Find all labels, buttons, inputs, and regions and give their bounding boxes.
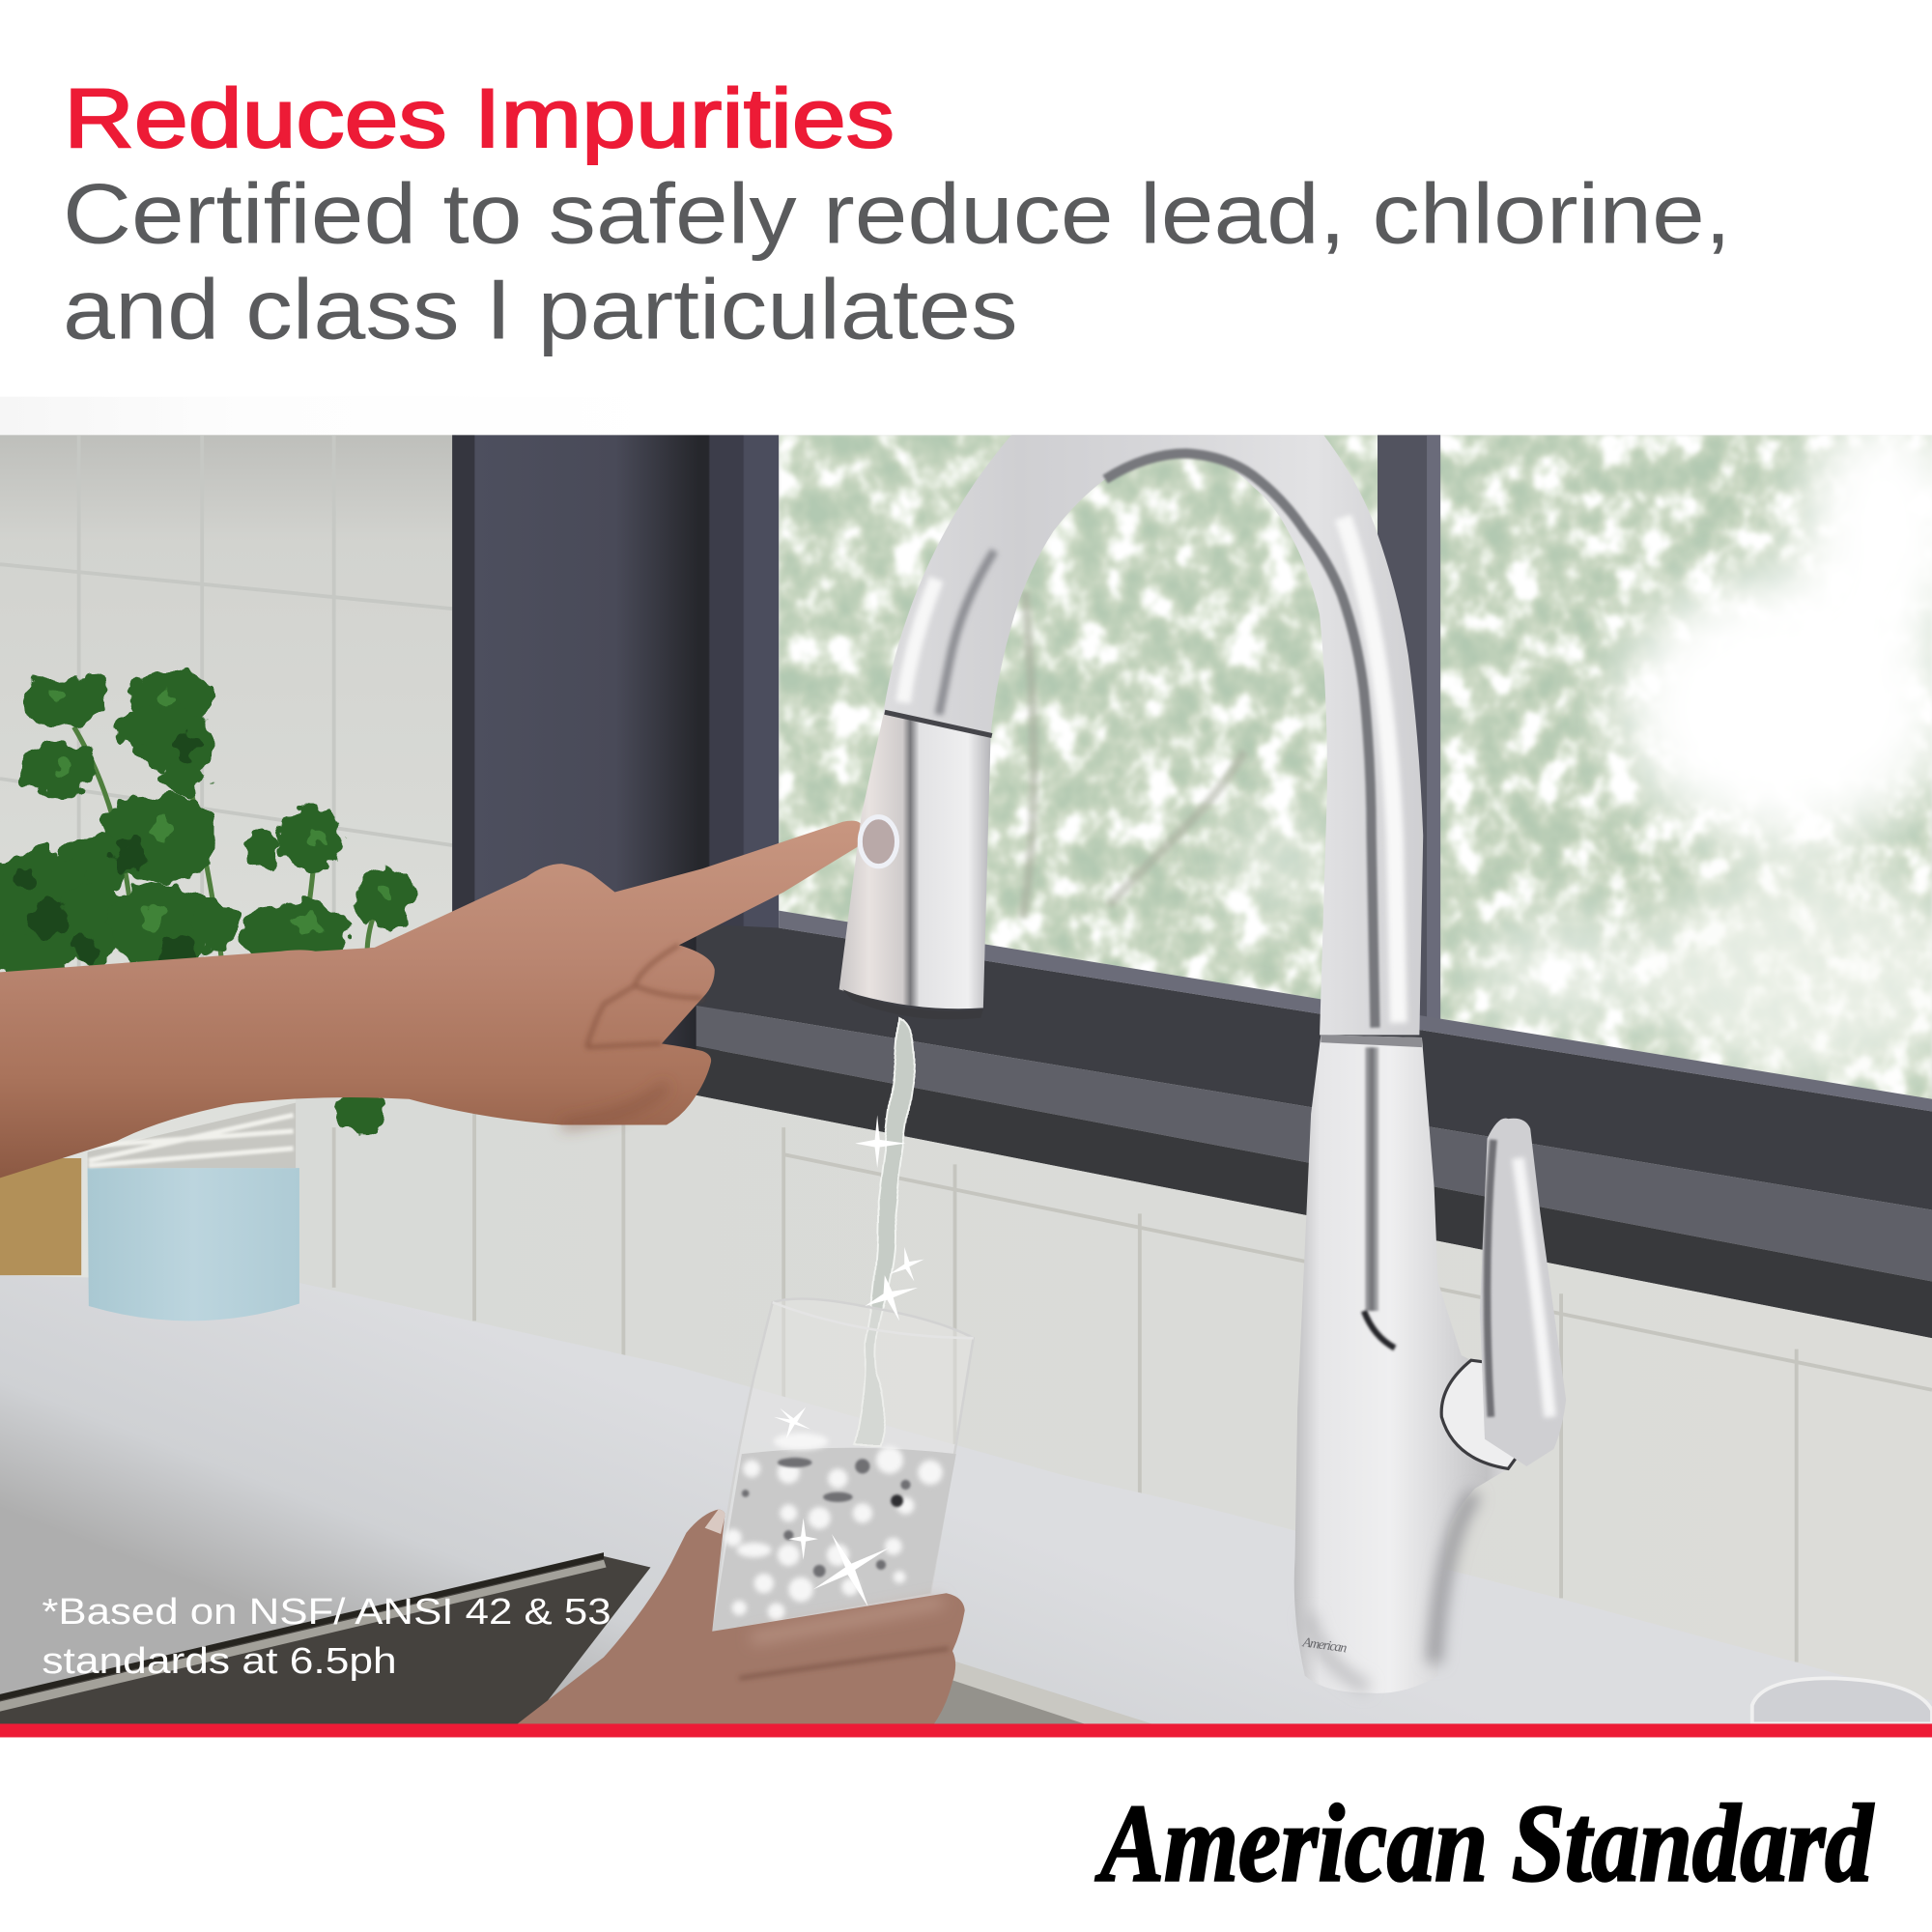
countertop	[0, 1275, 1932, 1723]
dark window frame	[452, 435, 779, 1096]
subtitle line 2: and class I particulates	[63, 262, 1018, 357]
blue pot	[88, 1103, 299, 1321]
subtitle line 1: Certified to safely reduce lead, chlorine,	[63, 165, 1731, 261]
plant	[0, 671, 414, 1131]
spray button	[860, 817, 897, 867]
heading text block	[63, 71, 1731, 357]
faucet brand mark: American	[1301, 1634, 1348, 1656]
sparkles	[774, 1115, 924, 1608]
drain cover on counter	[1752, 1678, 1932, 1723]
upper tiled wall	[0, 435, 456, 966]
pointing arm and hand	[0, 821, 864, 1178]
footnote: *Based on NSF/ ANSI 42 & 53	[42, 1591, 611, 1633]
handle hub	[1441, 1360, 1528, 1468]
water stream	[855, 1018, 915, 1444]
window scene with foliage	[779, 407, 1932, 1125]
red divider bar	[0, 1723, 1932, 1737]
pull-down spray head	[839, 715, 991, 1009]
window mullion	[1378, 435, 1440, 1026]
lever handle	[1480, 1119, 1566, 1466]
faucet body	[1294, 1035, 1508, 1693]
yellow pot	[0, 1158, 81, 1275]
lower hand holding glass	[518, 1509, 965, 1723]
faucet	[839, 425, 1566, 1693]
lower tiled wall	[296, 1095, 1932, 1713]
footnote	[42, 1591, 611, 1682]
footnote: standards at 6.5ph	[42, 1640, 397, 1682]
spout arc	[884, 425, 1423, 1035]
drinking glass with water	[712, 1299, 974, 1632]
photo: kitchen faucet scene	[0, 407, 1932, 1723]
sink basin	[0, 1552, 1152, 1723]
window sill	[696, 911, 1932, 1338]
title: Reduces Impurities	[64, 71, 895, 165]
